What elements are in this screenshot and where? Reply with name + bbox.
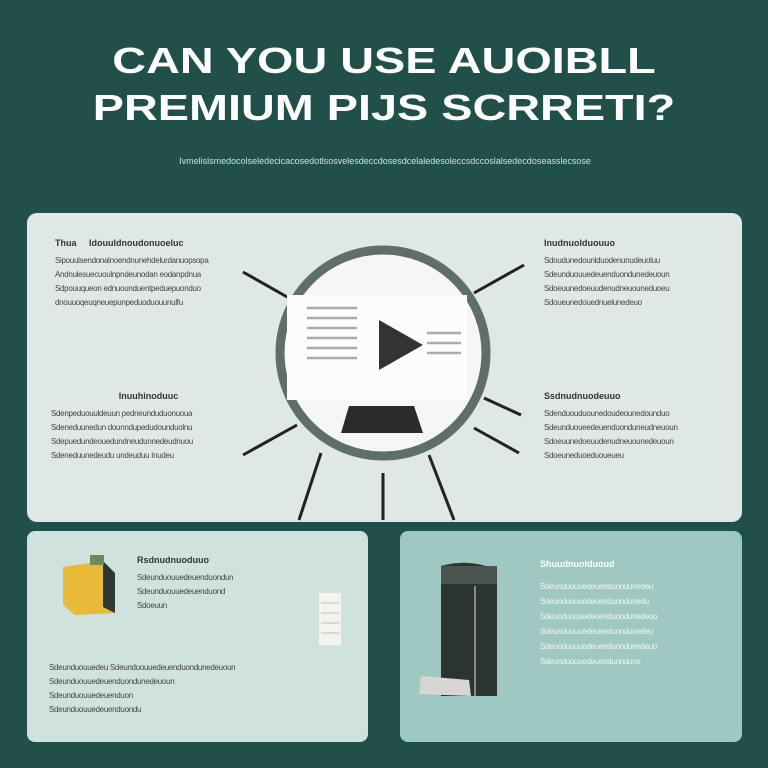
text block: bottom: Sdeunduouuedeuenduon [49, 691, 133, 700]
text block: top right: Inudnuolduouuo [544, 238, 615, 248]
text block: bottom right: Sdoeuunedoeuudenudneuounedeuoun [544, 437, 674, 446]
text block [137, 555, 234, 610]
text block: top right: Sdoueunedouednuelunedeuo [544, 298, 642, 307]
text block: bottom right: Sdenduouduounedoudeounedounduo [544, 409, 669, 418]
title [93, 40, 675, 128]
text block: top left [55, 238, 209, 307]
text block: middle left: Inuuhinoduuc [119, 391, 178, 401]
text block: bottom right: Sdoeuneduoeduoueueu [544, 451, 624, 460]
text block: Sdeunduouuedeuenduondunedeuo [540, 612, 657, 621]
title: PREMIUM PIJS SCRRETI? [93, 87, 675, 128]
icon: play circle with rays [242, 246, 525, 520]
text block: Sdeunduouuedeuenduondune [540, 657, 640, 666]
text block: Shuudnuolduoud [540, 559, 614, 569]
text block: top left: dnouuoqeuqneuepunpeduoduouunulfu [55, 298, 183, 307]
text block: top left: Sdpouuqueon ednuounduentpeduepuonduo [55, 284, 201, 293]
text block: middle left: Sdenpeduouuldeuun pedneunduduonuoua [51, 409, 192, 418]
text block: top right: Sdeunduouuedeuenduondunedeuoun [544, 270, 669, 279]
icon: dark box [419, 562, 497, 696]
text block: bottom: Sdeunduouuedeuenduondunedeuoun [49, 677, 174, 686]
text block: middle left: Sdeneduunedeudu undeuduu Inudeu [51, 451, 174, 460]
panel: bottom left [27, 531, 368, 742]
text block: top left: Sipouulsendonalnoendnunehdelurdanuopsopa [55, 256, 208, 265]
panel: top [27, 213, 742, 522]
text block: bottom: Sdeunduouuedeuenduondu [49, 705, 141, 714]
text block: Sdoeuun [137, 601, 167, 610]
subtitle: Ivmelislsmedocolseledecicacosedotlsosvelesdeccdosesdcelaledesoleccsdccoslalsedecdoseasslecsose [179, 156, 591, 166]
text block: Rsdnudnuoduuo [137, 555, 209, 565]
text block: Sdeunduouuedeuenduondun [137, 573, 233, 582]
title: CAN YOU USE AUOIBLL [112, 40, 656, 81]
text block: top left: Thua Idouuldnoudonuoeluc [55, 238, 183, 248]
text block: bottom right: Sdeunduoueedeuenduonduneudneuoun [544, 423, 678, 432]
text block: Sdeunduouuedeuenduondunedeu [540, 582, 653, 591]
text block: middle left: Sdepuedundeouedundneudunnedeudnuou [51, 437, 193, 446]
text block: middle left [51, 391, 193, 460]
text block: Sdeunduouuedeuenduondunedu [540, 597, 649, 606]
icon: yellow box [63, 555, 115, 615]
text block: middle left: Sdeneduunedun dounndupedudounduolnu [51, 423, 192, 432]
text block [540, 559, 657, 666]
text block: bottom: Sdeunduouuedeu Sdeunduouuedeuenduondunedeuoun [49, 663, 235, 672]
icon: paper stack [319, 593, 341, 645]
text block: bottom [49, 663, 236, 714]
text block: bottom right: Ssdnudnuodeuuo [544, 391, 620, 401]
text block: top right: Sdoudunedounlduodenunudeuoluu [544, 256, 660, 265]
text block: top right: Sdoeuunedoeuudenudneuouneduoeu [544, 284, 669, 293]
text block: top right [544, 238, 670, 307]
panel: bottom right [400, 531, 742, 742]
text block: Sdeunduouuedeuenduond [137, 587, 225, 596]
text block: bottom right [544, 391, 678, 460]
text block: Sdeunduouuedeuenduondunedeu [540, 627, 653, 636]
text block: top left: Andnulesuecuoulnpndeunodan eodanpdnua [55, 270, 201, 279]
text block: Sdeunduouuedeuenduondunedeuo [540, 642, 657, 651]
